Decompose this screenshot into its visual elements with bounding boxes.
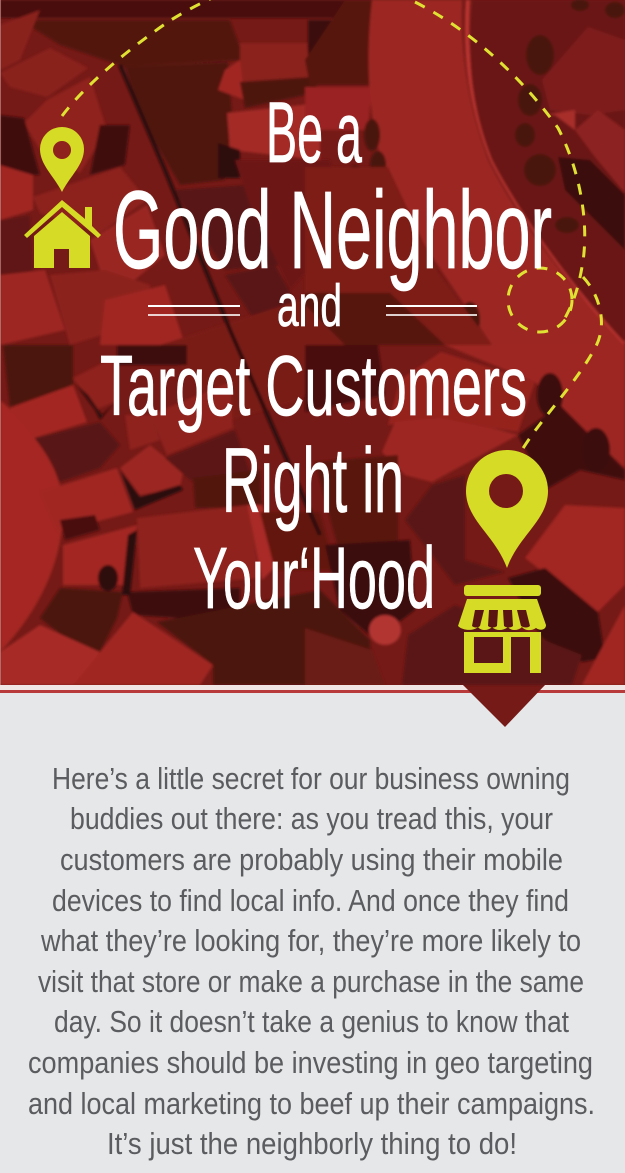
bottom left: [0, 625, 100, 685]
icon: small location pin: [40, 127, 84, 192]
trees left of road: [347, 119, 480, 338]
lower-centre roofs: [305, 345, 385, 412]
body line 2: buddies out there: as you tread this, your: [70, 801, 553, 836]
left edge highlight: [0, 0, 1, 685]
panel: aerial photo background: [0, 0, 625, 730]
top band: [0, 0, 370, 18]
trees right of road: [515, 0, 625, 233]
right double rule: [386, 305, 477, 316]
body line 10: It’s just the neighborly thing to do!: [107, 1126, 517, 1161]
road: [366, 0, 625, 346]
icon: house: [24, 200, 101, 268]
top middle dark lot: [306, 18, 332, 55]
icon: storefront: [458, 585, 546, 673]
top-left roof: [0, 48, 88, 97]
icon: large location pin: [466, 450, 548, 568]
dashed travel route: [62, 0, 601, 450]
white and red rule: [0, 685, 625, 693]
diagonal fence: [120, 65, 320, 535]
body paragraph: [28, 761, 595, 1161]
page lower panel: [0, 693, 625, 1173]
title line: Your 'Hood: Your‘Hood: [193, 530, 435, 627]
centre-top roofs: [240, 43, 310, 83]
body line 3: customers are probably using their mobile: [60, 842, 563, 877]
right houses: [542, 27, 625, 115]
title: [100, 85, 552, 627]
central lawn lots: [125, 62, 232, 185]
lower right road band: [445, 345, 625, 468]
title line: Right in: Right in: [222, 430, 404, 532]
road curb: [467, 0, 625, 343]
title line: and: and: [277, 273, 342, 339]
centre-left roofs: [120, 445, 183, 495]
cul-de-sac: [0, 400, 63, 652]
lawn right of road: [470, 0, 625, 343]
upper-left of lower half: [3, 345, 73, 407]
left double rule: [148, 305, 240, 316]
middle roofs beneath heading: [305, 167, 492, 345]
title line: Be a: Be a: [266, 85, 362, 181]
